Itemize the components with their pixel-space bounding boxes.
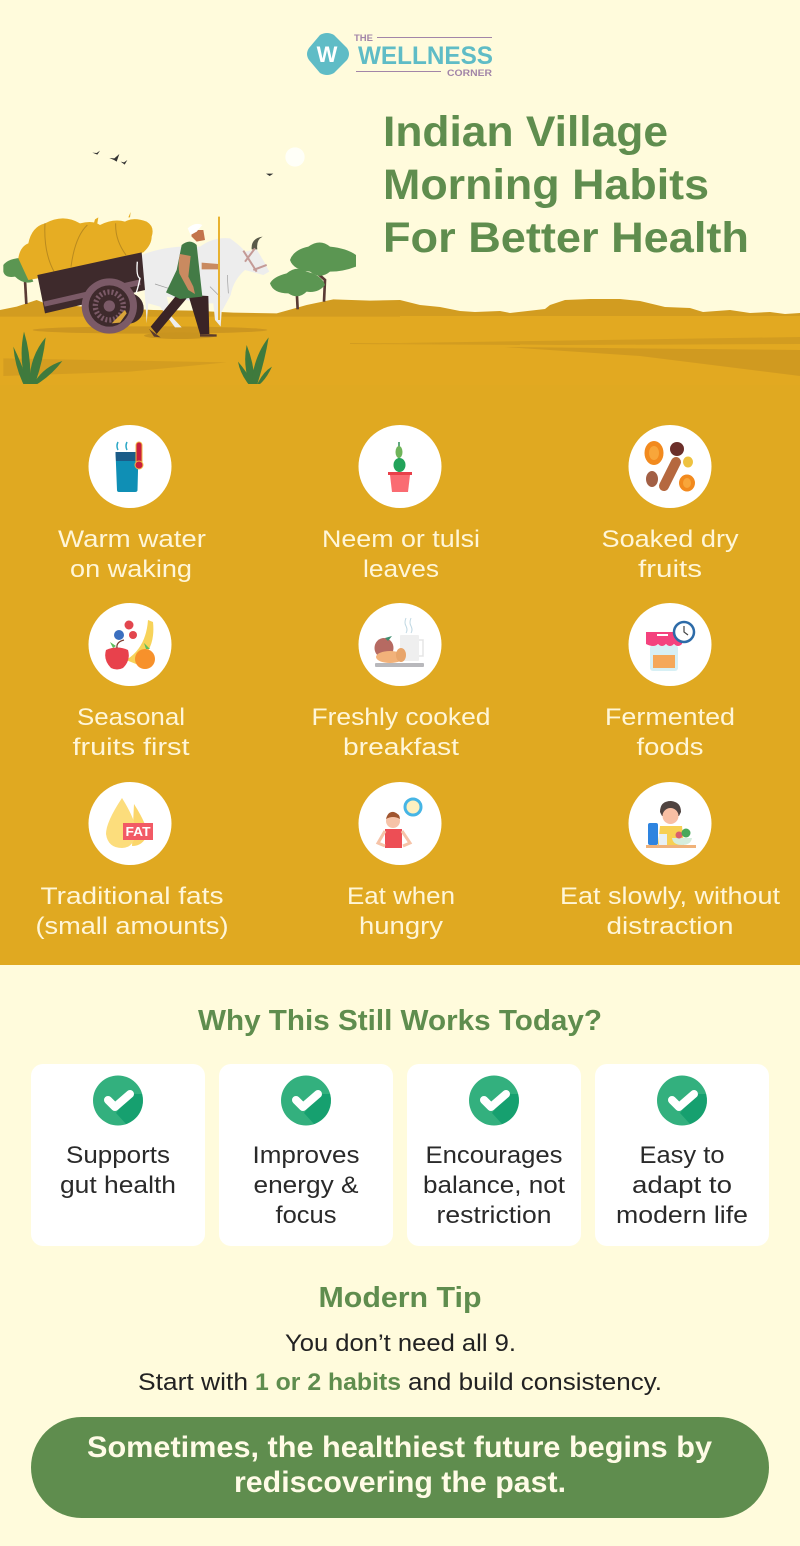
callout: closing message <box>31 1417 769 1518</box>
habit: seasonal fruits <box>88 603 172 686</box>
logo: The Wellness Corner: W <box>317 42 338 67</box>
label: traditional fats: Traditional fats <box>40 883 224 910</box>
label: fermented foods: foods <box>636 734 704 761</box>
farmer <box>149 217 219 337</box>
text: tip body <box>138 1330 662 1396</box>
logo: The Wellness Corner <box>307 33 493 78</box>
label: traditional fats <box>36 883 228 940</box>
card: improves energy and focus <box>219 1064 393 1246</box>
label: soaked dry fruits <box>602 526 739 583</box>
card: easy to adapt: modern life <box>616 1202 748 1229</box>
cart <box>37 252 145 313</box>
label: eat when hungry: Eat when <box>347 883 455 910</box>
habit: traditional fats: FAT <box>126 824 151 839</box>
title: For Better Health <box>383 214 749 262</box>
card: encourages balance: balance, not <box>423 1172 565 1199</box>
hay load <box>18 212 153 280</box>
logo: The Wellness Corner: CORNER <box>447 68 493 78</box>
label: freshly cooked breakfast <box>312 704 490 761</box>
text: tip body: and build consistency. <box>408 1369 662 1396</box>
hills, left and centre <box>0 299 400 317</box>
card: improves energy and focus: Improves <box>252 1142 360 1169</box>
logo: The Wellness Corner: WELLNESS <box>358 42 493 70</box>
heading: why this still works: Why This Still Works Today? <box>198 1005 602 1037</box>
text: tip body: Start with <box>138 1369 248 1396</box>
birds <box>92 151 273 176</box>
card: easy to adapt: Easy to <box>640 1142 724 1169</box>
title: Indian Village <box>383 108 668 156</box>
title <box>383 108 749 262</box>
grass tufts <box>13 332 272 384</box>
label: warm water: Warm water <box>58 526 206 553</box>
habit: neem or tulsi <box>358 425 442 508</box>
label: seasonal fruits: fruits first <box>72 734 190 761</box>
label: eat when hungry: hungry <box>359 913 444 940</box>
label: eat slowly: distraction <box>606 913 734 940</box>
card: encourages balance: Encourages <box>426 1142 562 1169</box>
card: supports gut health <box>31 1064 205 1246</box>
label: freshly cooked breakfast: Freshly cooked <box>312 704 490 731</box>
illustration: village landscape with bullock cart <box>0 147 800 415</box>
card: improves energy and focus: focus <box>276 1202 336 1229</box>
habit: eat when hungry <box>358 782 442 865</box>
habit: traditional fats <box>88 782 172 865</box>
trees <box>3 242 356 309</box>
label: neem or tulsi: leaves <box>363 556 439 583</box>
habit: freshly cooked breakfast <box>358 603 442 686</box>
label: soaked dry fruits: Soaked dry <box>602 526 739 553</box>
heading: modern tip: Modern Tip <box>318 1282 482 1314</box>
label: eat when hungry <box>347 883 455 940</box>
label: warm water <box>58 526 206 583</box>
card: encourages balance: restriction <box>436 1202 552 1229</box>
panel: nine morning habits <box>0 385 800 965</box>
card: encourages balance <box>407 1064 581 1246</box>
text: tip body: 1 or 2 habits <box>255 1369 401 1396</box>
card: supports gut health: gut health <box>60 1172 176 1199</box>
text: tip body: You don’t need all 9. <box>285 1330 516 1357</box>
label: seasonal fruits <box>72 704 190 761</box>
card: supports gut health: Supports <box>66 1142 170 1169</box>
habit: fermented foods <box>628 603 712 686</box>
card: easy to adapt: adapt to <box>632 1172 732 1199</box>
ground shadows <box>3 358 227 376</box>
label: neem or tulsi: Neem or tulsi <box>322 526 480 553</box>
label: fermented foods: Fermented <box>605 704 735 731</box>
card: improves energy and focus: energy & <box>254 1172 358 1199</box>
title: Morning Habits <box>383 161 709 209</box>
habit: eat slowly <box>628 782 712 865</box>
label: seasonal fruits: Seasonal <box>77 704 185 731</box>
logo: The Wellness Corner: THE <box>354 33 373 43</box>
callout: closing message: rediscovering the past. <box>234 1466 566 1499</box>
label: fermented foods <box>605 704 735 761</box>
label: freshly cooked breakfast: breakfast <box>343 734 459 761</box>
cart wheels <box>82 278 144 334</box>
callout: closing message: Sometimes, the healthiest future begins by <box>87 1431 712 1464</box>
ox <box>142 237 269 327</box>
label: warm water: on waking <box>70 556 192 583</box>
label: eat slowly: Eat slowly, without <box>560 883 780 910</box>
label: traditional fats: (small amounts) <box>36 913 228 940</box>
label: soaked dry fruits: fruits <box>638 556 702 583</box>
card: easy to adapt <box>595 1064 769 1246</box>
label: neem or tulsi <box>322 526 480 583</box>
label: eat slowly <box>560 883 780 940</box>
sun <box>285 147 305 167</box>
habit: soaked dry fruits <box>628 425 712 508</box>
habit: warm water <box>88 425 172 508</box>
